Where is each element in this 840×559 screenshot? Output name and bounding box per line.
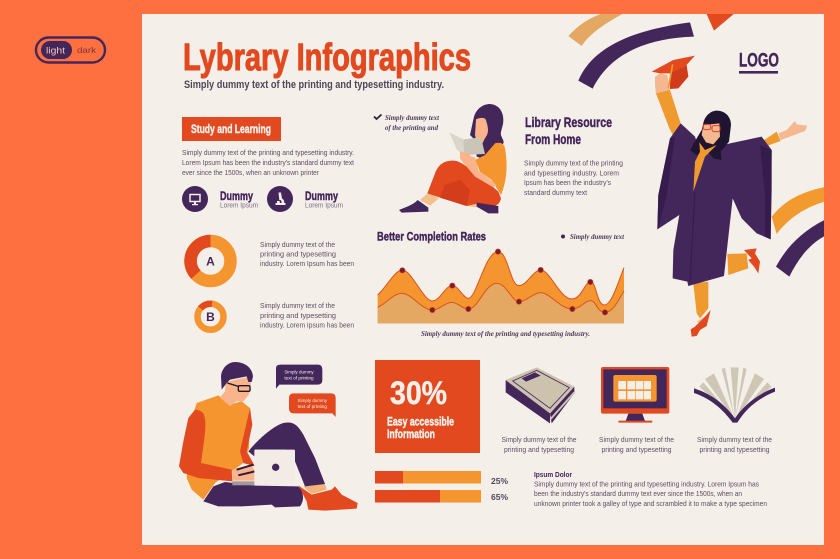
main panel — [142, 14, 824, 545]
icon: monitor — [182, 186, 208, 212]
text block: library resource: standard dummy text — [524, 188, 587, 197]
light dark toggle: light — [46, 46, 66, 56]
text block: library resource: Simply dummy text of the printing — [524, 158, 623, 168]
text block: ipsum dolor: Simply dummy text of the printing and typesetting industry. Lorem Ipsum has — [534, 480, 759, 488]
caption: monitor: Simply dummy text of the — [599, 435, 674, 444]
heading: library resource: From Home — [525, 131, 581, 147]
callout: check note: Simply dummy text — [385, 113, 440, 122]
panel: study and learning — [182, 117, 354, 212]
callout: check note — [374, 113, 440, 132]
label: dummy two: Dummy — [305, 189, 338, 203]
speech bubble: red — [289, 393, 336, 417]
label: dummy two — [305, 189, 343, 210]
caption: closed book: printing and typesetting — [504, 445, 574, 454]
progress bar 65 percent: 65% — [491, 492, 508, 502]
decorative arcs — [568, 13, 827, 277]
text block: ipsum dolor: been the industry's standard dummy text ever since the 1500s, when an — [534, 489, 742, 498]
donut chart B: B — [206, 310, 215, 324]
callout: 30 percent: 30% — [390, 375, 447, 411]
callout: 30 percent — [375, 360, 480, 453]
text: donut B: industry. Lorem Ipsum has been — [260, 320, 354, 330]
illustration: man with laptop — [179, 362, 358, 511]
caption: open book: printing and typesetting — [700, 445, 770, 454]
chart heading: Better Completion Rates — [377, 230, 486, 244]
heading: library resource: Library Resource — [525, 114, 612, 130]
label: dummy two: Lorem Ipsum — [305, 202, 343, 210]
text block: library resource: and typesetting industry. Lorem — [524, 168, 619, 178]
icon: closed book — [506, 367, 574, 423]
text: donut A: industry. Lorem Ipsum has been — [260, 259, 354, 268]
caption: closed book — [502, 435, 577, 454]
caption: open book: Simply dummy text of the — [697, 435, 772, 444]
progress bar 25 percent — [375, 471, 508, 486]
text: donut A: printing and typesetting — [260, 250, 336, 258]
speech bubble: purple: text of printing — [284, 375, 314, 380]
heading: library resource — [525, 114, 612, 147]
text: donut B: Simply dummy text of the — [260, 301, 335, 310]
caption: open book — [697, 435, 772, 454]
text block — [182, 148, 354, 177]
light dark toggle: dark — [77, 45, 97, 55]
donut chart B — [198, 304, 224, 330]
text block: Simply dummy text of the printing and typesetting industry. — [182, 148, 354, 157]
speech bubble: purple — [276, 365, 322, 389]
text block: ipsum dolor: Ipsum Dolor — [534, 470, 572, 479]
caption: closed book: Simply dummy text of the — [502, 435, 577, 444]
speech bubble: red: text of printing — [298, 404, 327, 409]
caption: monitor: printing and typesetting — [602, 445, 672, 454]
text: donut A: Simply dummy text of the — [260, 240, 335, 249]
illustration: graduate — [652, 56, 807, 337]
chart legend: Simply dummy text — [570, 232, 625, 241]
text: donut A — [260, 240, 354, 268]
light dark toggle — [36, 38, 105, 62]
progress bar 65 percent — [375, 490, 508, 502]
icon: monitor with grid — [601, 367, 669, 423]
callout: 30 percent: Easy accessible — [387, 416, 454, 428]
speech bubble: red: Simply dummy — [298, 398, 328, 403]
text block: ipsum dolor — [534, 470, 767, 508]
donut chart A: A — [206, 254, 215, 268]
callout: 30 percent: Information — [387, 429, 435, 441]
text block: library resource — [524, 158, 623, 197]
text: donut B — [260, 301, 354, 330]
illustration: woman reading — [399, 104, 507, 213]
subtitle: Simply dummy text of the printing and typesetting industry. — [184, 79, 444, 91]
progress bar 25 percent: 25% — [491, 476, 508, 486]
text block: Lorem Ipsum has been the industry's standard dummy text — [182, 158, 354, 167]
label: dummy one — [220, 189, 258, 210]
title: Lybrary Infographics — [183, 37, 471, 79]
text block: ipsum dolor: unknown printer took a galley of type and scrambled it to make a type specimen — [534, 499, 767, 508]
text block: library resource: Ipsum has been the industry's — [524, 178, 611, 187]
logo — [739, 50, 779, 74]
icon: open book — [694, 367, 775, 423]
label: dummy one: Dummy — [220, 189, 253, 203]
icon: microscope — [267, 186, 293, 212]
caption: monitor — [599, 435, 674, 454]
chart caption: Simply dummy text of the printing and typesetting industry. — [421, 329, 590, 338]
logo: LOGO — [739, 50, 779, 72]
area chart — [378, 249, 624, 323]
heading: study and learning — [182, 117, 281, 141]
speech bubble: purple: Simply dummy — [284, 369, 314, 374]
text block: ever since the 1500s, when an unknown printer — [182, 168, 320, 177]
label: dummy one: Lorem Ipsum — [220, 202, 258, 210]
heading: study and learning: Study and Learning — [191, 124, 271, 136]
callout: check note: of the printing and — [385, 123, 438, 132]
donut chart A — [190, 241, 230, 281]
text: donut B: printing and typesetting — [260, 311, 336, 320]
